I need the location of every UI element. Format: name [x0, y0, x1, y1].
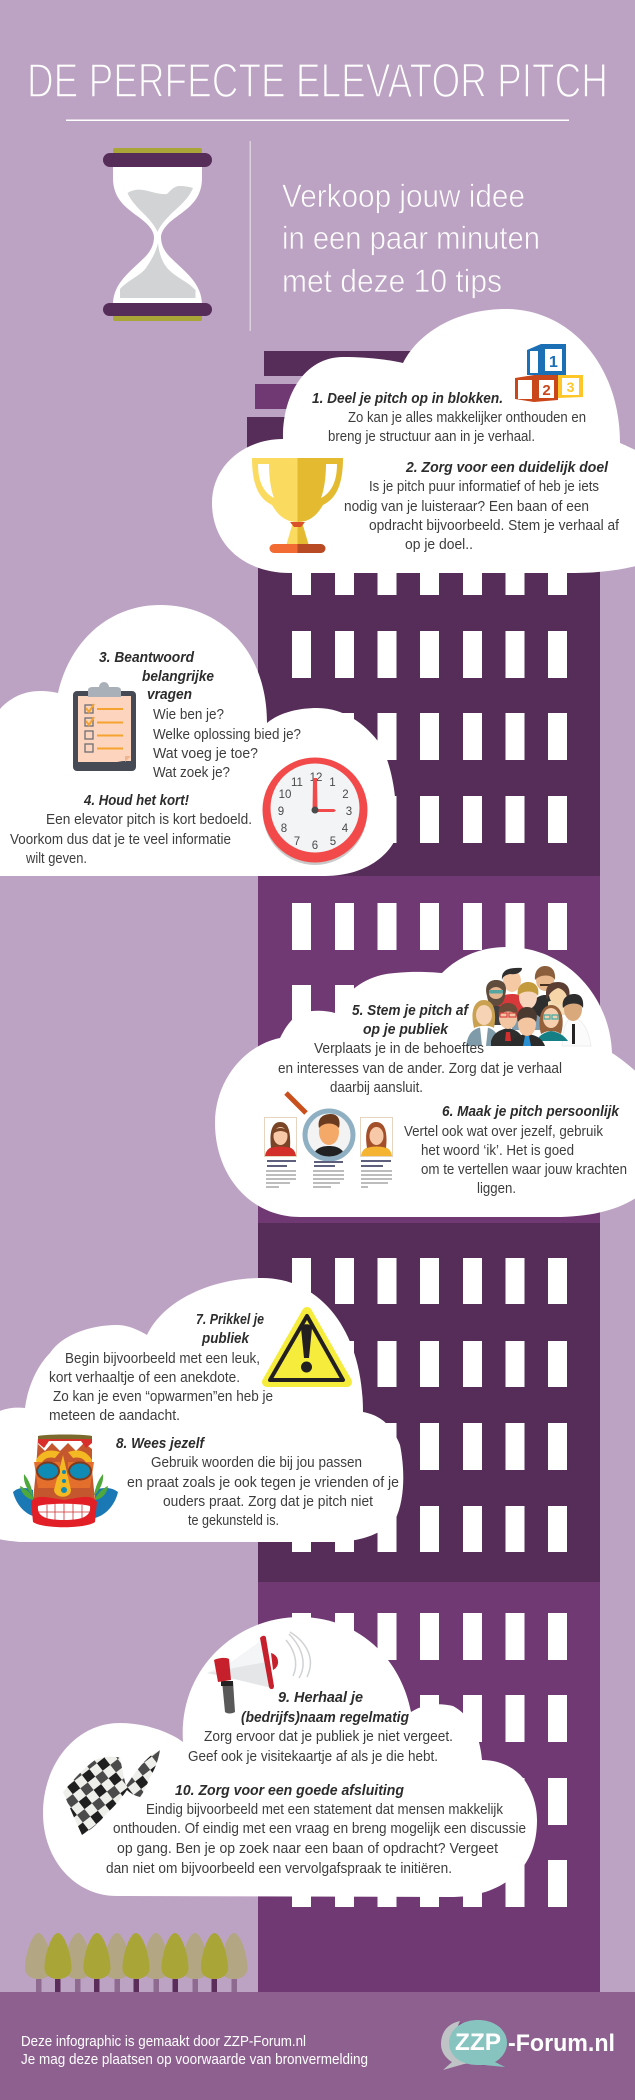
tip 6 text: het woord ‘ik’. Het is goed	[421, 1143, 574, 1159]
tip 5 text	[278, 1041, 562, 1096]
tip 2 text: opdracht bijvoorbeeld. Stem je verhaal af	[369, 518, 620, 534]
icon: clock: 9	[278, 806, 284, 818]
tip 8 text: en praat zoals je ook tegen je vrienden of je	[127, 1475, 399, 1491]
tip 2 text: Is je pitch puur informatief of heb je iets	[369, 479, 599, 495]
icon: clock: 11	[291, 777, 303, 789]
tip 8 heading: 8. Wees jezelf	[116, 1435, 206, 1452]
tip 9 heading: 9. Herhaal je	[278, 1689, 363, 1706]
building	[247, 351, 600, 1992]
tip 7 text: Begin bijvoorbeeld met een leuk,	[65, 1351, 260, 1367]
icon: number blocks	[515, 344, 583, 402]
subtitle: in een paar minuten	[282, 220, 540, 256]
tip 3 text: Welke oplossing bied je?	[153, 727, 301, 743]
tip 1 text: breng je structuur aan in je verhaal.	[328, 429, 535, 445]
tip 4 text: Een elevator pitch is kort bedoeld.	[46, 812, 252, 828]
tip 10 heading: 10. Zorg voor een goede afsluiting	[175, 1782, 404, 1799]
tip 1 text	[328, 410, 586, 445]
icon: number blocks: 1	[549, 354, 558, 371]
tip 6 text	[404, 1124, 627, 1197]
tip 10 text: dan niet om bijvoorbeeld een vervolgafspraak te initiëren.	[106, 1861, 452, 1877]
tip 2 text	[344, 479, 620, 553]
tip 10 text: onthouden. Of eindig met een vraag en breng mogelijk een discussie	[113, 1821, 526, 1837]
subtitle: Verkoop jouw idee	[282, 178, 525, 214]
tip 3 text: Wat voeg je toe?	[153, 746, 258, 762]
tip 9 text	[188, 1729, 453, 1765]
tip 3 heading: 3. Beantwoord	[99, 649, 195, 666]
tip 9 heading: (bedrijfs)naam regelmatig	[241, 1709, 409, 1726]
footer credit text: Je mag deze plaatsen op voorwaarde van bronvermelding	[21, 2051, 368, 2068]
tip 6 heading: 6. Maak je pitch persoonlijk	[442, 1103, 620, 1120]
tip 6 text: Vertel ook wat over jezelf, gebruik	[404, 1124, 604, 1140]
icon: megaphone	[207, 1632, 310, 1714]
panel: tips 5 and 6	[215, 947, 635, 1217]
tip 9 text: Zorg ervoor dat je publiek je niet vergeet.	[204, 1729, 453, 1745]
icon: number blocks: 2	[542, 382, 551, 399]
tip 8 text: te gekunsteld is.	[188, 1513, 279, 1529]
tip 4 text: wilt geven.	[25, 851, 87, 867]
tip 5 heading: 5. Stem je pitch af	[352, 1002, 470, 1019]
tip 8 text	[127, 1455, 399, 1529]
icon: clock: 3	[346, 806, 352, 818]
icon: clipboard	[73, 682, 136, 771]
tip 3 text	[153, 707, 301, 781]
tip 3 text: Wat zoek je?	[153, 765, 230, 781]
icon: checkered flag	[63, 1750, 160, 1835]
footer band	[0, 1992, 635, 2100]
tip 7 heading: 7. Prikkel je	[196, 1311, 264, 1328]
tip 8 text: ouders praat. Zorg dat je pitch niet	[163, 1494, 373, 1510]
tip 3 heading: belangrijke	[142, 668, 214, 685]
tip 3 heading: vragen	[147, 686, 192, 703]
tip 10 text	[106, 1802, 526, 1877]
tip 5 heading: op je publiek	[363, 1021, 449, 1038]
tip 8 text: Gebruik woorden die bij jou passen	[151, 1455, 362, 1471]
icon: audience	[466, 966, 591, 1046]
tip 6 text: liggen.	[477, 1181, 516, 1197]
panel: tips 3 and 4	[0, 605, 396, 876]
icon: clock: 6	[312, 840, 318, 852]
tip 10 text: op gang. Ben je op zoek naar een baan of opdracht? Vergeet	[117, 1841, 498, 1857]
panel: tips 9 and 10	[43, 1617, 537, 1897]
tip 5 text: daarbij aansluit.	[330, 1080, 423, 1096]
footer credit text	[21, 2033, 368, 2068]
tip 9 heading	[241, 1689, 409, 1726]
icon: clock: 10	[279, 789, 291, 801]
tip 2 text: nodig van je luisteraar? Een baan of een	[344, 499, 589, 515]
tip 9 text: Geef ook je visitekaartje af als je die hebt.	[188, 1749, 438, 1765]
tip 4 heading: 4. Houd het kort!	[83, 792, 189, 809]
icon: clock: 5	[330, 836, 336, 848]
tip 7 text: Zo kan je even “opwarmen”en heb je	[53, 1389, 273, 1405]
tip 3 text: Wie ben je?	[153, 707, 224, 723]
footer credit text: Deze infographic is gemaakt door ZZP-Forum.nl	[21, 2033, 306, 2050]
icon: trophy	[252, 458, 343, 553]
tip 3 heading	[99, 649, 214, 703]
icon: tiki mask	[13, 1434, 118, 1527]
tip 7 text: meteen de aandacht.	[49, 1408, 180, 1424]
icon: clock: 8	[281, 823, 287, 835]
icon: clock: 2	[342, 789, 349, 801]
logo: ZZP-Forum.nl	[441, 2020, 615, 2070]
tip 1 text: Zo kan je alles makkelijker onthouden en	[348, 410, 586, 426]
icon: resumes with magnifying glass	[264, 1093, 392, 1188]
tip 7 text	[49, 1351, 273, 1424]
logo: ZZP-Forum.nl: -Forum.nl	[508, 2030, 615, 2057]
subtitle: met deze 10 tips	[282, 263, 502, 299]
tip 5 heading	[352, 1002, 470, 1038]
tip 2 heading: 2. Zorg voor een duidelijk doel	[405, 459, 609, 476]
tip 7 text: kort verhaaltje of een anekdote.	[49, 1370, 240, 1386]
tip 4 text	[10, 812, 252, 867]
logo: ZZP-Forum.nl: ZZP	[455, 2029, 501, 2056]
tip 4 text: Voorkom dus dat je te veel informatie	[10, 832, 231, 848]
icon: clock	[262, 758, 368, 865]
tip 5 text: en interesses van de ander. Zorg dat je verhaal	[278, 1061, 562, 1077]
panel: tips 1 and 2	[212, 309, 635, 573]
panel: tips 7 and 8	[0, 1278, 403, 1542]
subtitle	[282, 178, 540, 299]
tip 7 heading: publiek	[201, 1330, 250, 1347]
tip 10 text: Eindig bijvoorbeeld met een statement dat mensen makkelijk	[146, 1802, 504, 1818]
tip 2 text: op je doel..	[405, 537, 473, 553]
icon: clock: 7	[294, 836, 300, 848]
trees	[25, 1933, 248, 1992]
tip 7 heading	[196, 1311, 264, 1347]
icon: clock: 4	[342, 823, 349, 835]
icon: clock: 12	[310, 772, 322, 784]
icon: clock: 1	[329, 777, 336, 789]
icon: warning sign	[267, 1312, 347, 1382]
icon: number blocks: 3	[567, 379, 575, 395]
tip 5 text: Verplaats je in de behoeftes	[314, 1041, 484, 1057]
icon: hourglass	[103, 148, 212, 321]
tip 1 heading: 1. Deel je pitch op in blokken.	[312, 390, 503, 407]
